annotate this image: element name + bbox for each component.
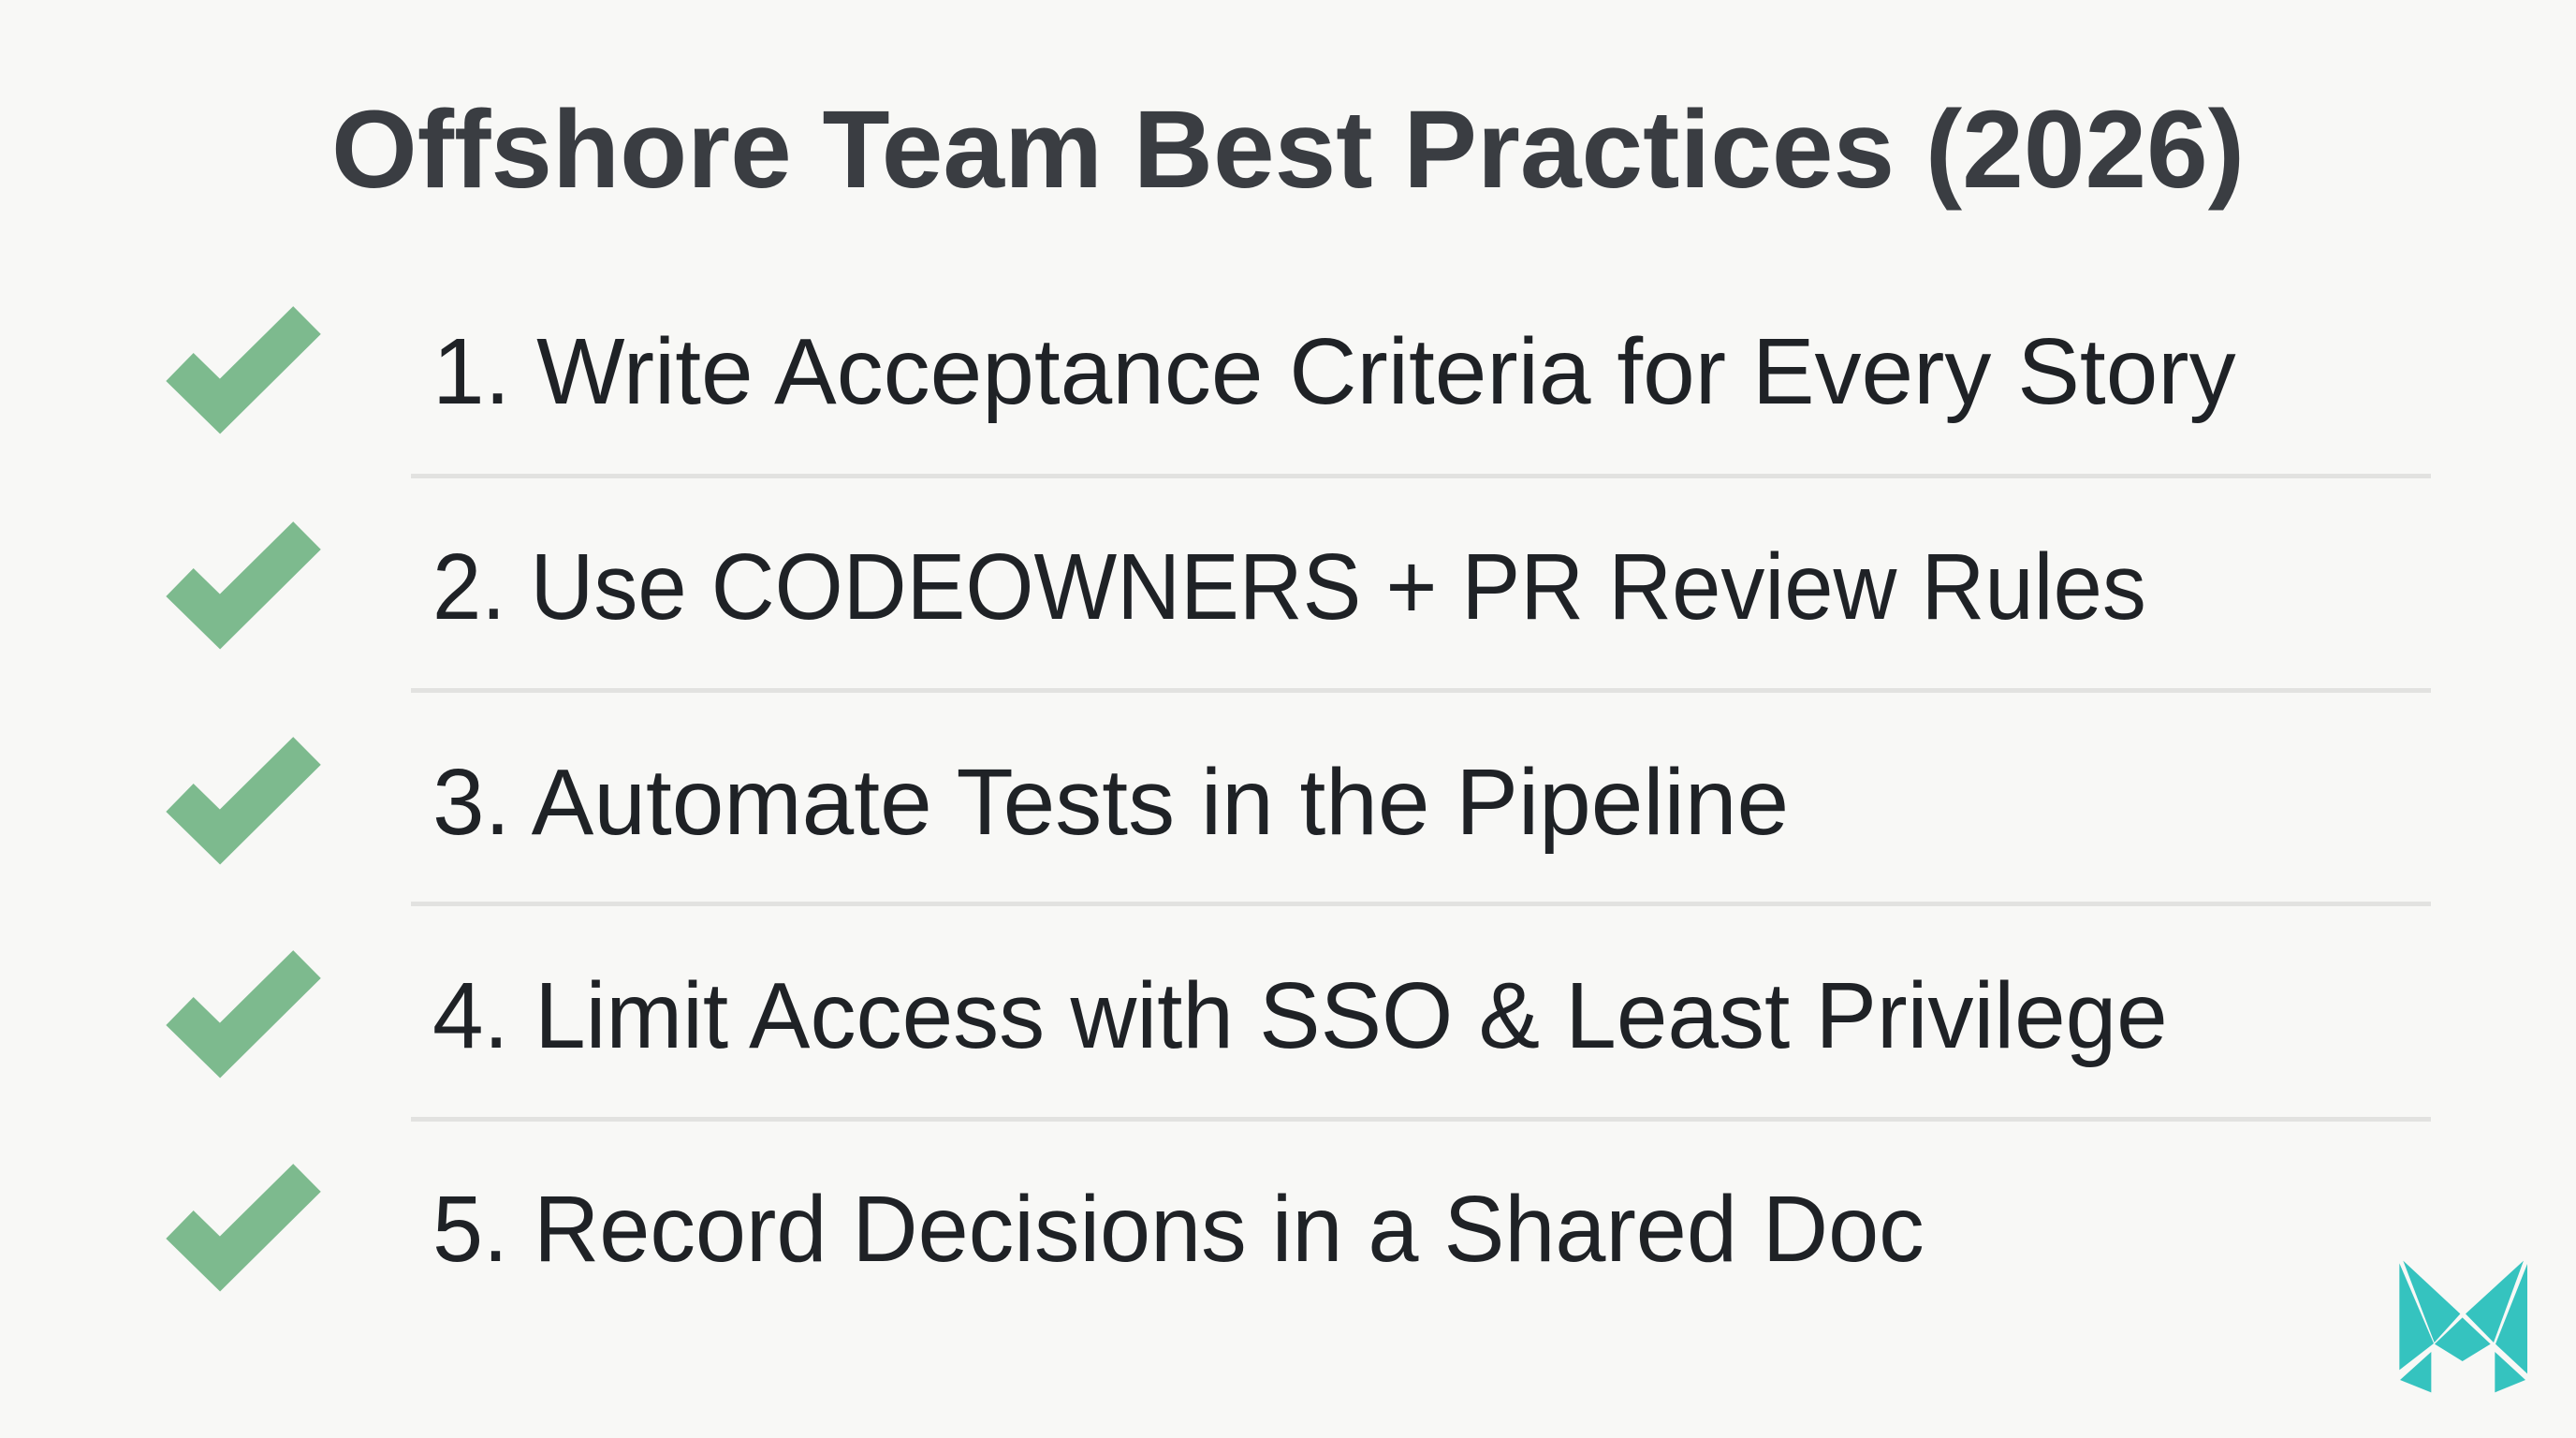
text: 5. Record Decisions in a Shared Doc bbox=[432, 1177, 1925, 1282]
icon: check bbox=[167, 1164, 321, 1292]
item 1 bbox=[167, 306, 2236, 434]
text: 4. Limit Access with SSO & Least Privilege bbox=[432, 963, 2168, 1068]
text: 3. Automate Tests in the Pipeline bbox=[432, 750, 1789, 855]
item 3 bbox=[167, 737, 1789, 865]
icon: check bbox=[167, 950, 321, 1078]
item 4 bbox=[167, 950, 2168, 1078]
logo bbox=[2399, 1260, 2527, 1393]
icon: check bbox=[167, 521, 321, 650]
icon: check bbox=[167, 306, 321, 434]
item 2 bbox=[167, 521, 2146, 650]
icon: check bbox=[167, 737, 321, 865]
item 5 bbox=[167, 1164, 1925, 1292]
title: Offshore Team Best Practices (2026) bbox=[331, 88, 2245, 212]
text: 1. Write Acceptance Criteria for Every Story bbox=[432, 319, 2236, 424]
text: 2. Use CODEOWNERS + PR Review Rules bbox=[432, 535, 2146, 639]
